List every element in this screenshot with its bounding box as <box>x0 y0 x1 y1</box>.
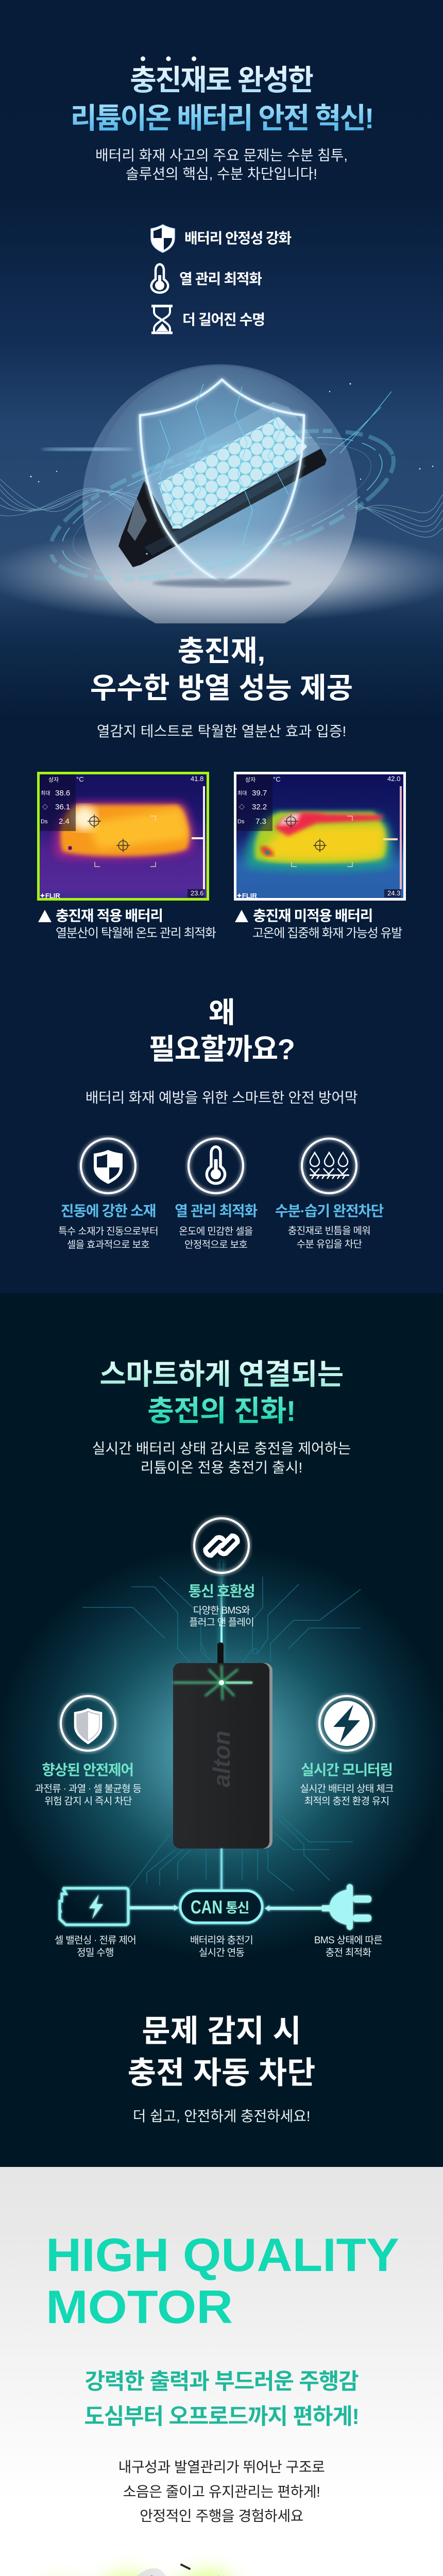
benefit text 1 <box>58 1226 158 1250</box>
icon: chain <box>191 1515 252 1577</box>
benefit text 3: 충진재로 빈틈을 메워 <box>288 1226 370 1236</box>
readouts <box>236 774 401 900</box>
monitoring text: 실시간 배터리 상태 체크 <box>300 1784 394 1794</box>
illustration: shielded battery pack <box>0 364 443 623</box>
motor subheading: 강력한 출력과 부드러운 주행감 <box>85 2369 358 2394</box>
diagram text: plug: BMS 상태에 따른 <box>314 1935 382 1946</box>
readouts: 상자 <box>245 776 255 783</box>
waves: left <box>0 479 149 520</box>
motor subheading <box>84 2369 359 2429</box>
panel: high quality motor <box>0 2167 443 2576</box>
caption text right: 고온에 집중해 화재 가능성 유발 <box>252 926 402 940</box>
heading: why needed <box>149 996 294 1065</box>
thermal image: with filler <box>37 772 209 901</box>
arrow: battery to CAN <box>129 1906 175 1909</box>
readouts: 36.1 <box>55 803 70 811</box>
hero dots <box>141 56 196 61</box>
hero title line 1: 충진재로 완성한 <box>130 64 313 96</box>
crosshairs <box>88 815 130 852</box>
monitoring text: 최적의 충전 환경 유지 <box>304 1796 389 1807</box>
safety title: 향상된 안전제어 <box>42 1762 133 1778</box>
compatibility title: 통신 호환성 <box>189 1583 254 1599</box>
readouts <box>40 774 204 900</box>
readouts: °C <box>273 775 281 783</box>
benefit text 2: 안정적으로 보호 <box>184 1240 247 1250</box>
diagram text: CAN: 실시간 연동 <box>199 1947 244 1958</box>
brake disc <box>69 2557 189 2576</box>
motor text: 안정적인 주행을 경험하세요 <box>140 2508 303 2524</box>
compatibility text: 플러그 앤 플레이 <box>189 1617 254 1628</box>
diagram text: plug <box>314 1935 382 1958</box>
icon: checkered shield <box>150 224 175 253</box>
caption title right: 충진재 미적용 배터리 <box>253 908 372 924</box>
benefit text 1: 셀을 효과적으로 보호 <box>67 1240 149 1250</box>
hero text <box>95 147 348 182</box>
compatibility text <box>189 1605 254 1628</box>
heading: why needed: 왜 <box>209 996 234 1029</box>
motor subheading: 도심부터 오프로드까지 편하게! <box>84 2404 359 2429</box>
motor text <box>118 2459 325 2524</box>
battery case <box>118 449 327 567</box>
icon: circle shield <box>77 1135 139 1197</box>
readouts: ✦FLIR <box>236 892 257 900</box>
charger intro text: 리튬이온 전용 충전기 출시! <box>141 1460 302 1476</box>
diagram text: CAN <box>190 1935 253 1958</box>
heading: smart connected: 스마트하게 연결되는 <box>99 1358 344 1391</box>
heading: high quality motor: MOTOR <box>46 2281 233 2332</box>
benefit text 1: 특수 소재가 진동으로부터 <box>58 1226 158 1237</box>
readouts: 최대 <box>237 790 247 796</box>
readouts: ◇ <box>239 804 245 810</box>
heat halo <box>55 802 193 859</box>
brand mark: alton <box>208 1731 235 1787</box>
green glow <box>33 2552 397 2576</box>
heading: heat dissipation <box>90 635 353 704</box>
caption: with filler <box>38 908 216 940</box>
feature 2: 열 관리 최적화 <box>179 271 262 287</box>
heading: high quality motor <box>46 2229 399 2332</box>
glow: light beam <box>220 1561 223 1662</box>
charger cable <box>217 1642 224 1664</box>
particles <box>30 383 433 554</box>
heading: high quality motor: HIGH QUALITY <box>46 2229 399 2281</box>
caption text left: 열분산이 탁월해 온도 관리 최적화 <box>56 926 216 940</box>
hero title line 2: 리튬이온 배터리 안전 혁신! <box>70 102 373 134</box>
energy shield outline <box>140 380 304 583</box>
diagram: CAN communication <box>57 1846 373 1932</box>
benefit text 3 <box>288 1226 370 1250</box>
thermal image: without filler <box>234 772 406 901</box>
benefit title 1: 진동에 강한 소재 <box>61 1203 156 1219</box>
readouts: 32.2 <box>252 803 267 811</box>
lightning arcs <box>160 384 391 546</box>
arrow: plug to CAN <box>269 1907 325 1910</box>
CAN label: CAN <box>191 1896 223 1918</box>
readouts: 38.6 <box>55 789 70 798</box>
icon: thermometer <box>150 263 169 294</box>
safety text: 위험 감지 시 즉시 차단 <box>44 1796 132 1807</box>
panel: smart charger <box>0 1293 443 2167</box>
readouts: ✦FLIR <box>40 892 60 900</box>
icon: lightning <box>316 1692 378 1754</box>
sphere <box>82 364 357 639</box>
glow: floor light <box>0 526 443 623</box>
icon: circle moisture <box>298 1135 360 1197</box>
heading: heat dissipation: 우수한 방열 성능 제공 <box>90 672 353 704</box>
charger body <box>172 1663 272 1849</box>
subheading: smart barrier: 배터리 화재 예방을 위한 스마트한 안전 방어막 <box>86 1090 357 1106</box>
plug icon <box>322 1884 353 1930</box>
benefit text 3: 수분 유입을 차단 <box>297 1239 362 1250</box>
readouts: ◇ <box>42 804 48 810</box>
feature 3: 더 길어진 수명 <box>182 312 265 328</box>
caption: without filler <box>235 908 402 940</box>
readouts: °C <box>76 775 84 783</box>
diagram text: CAN: 배터리와 충전기 <box>190 1935 253 1946</box>
heading: heat dissipation: 충진재, <box>178 635 265 667</box>
orbit: tech swirl <box>35 400 409 609</box>
triangle marker right <box>235 910 248 922</box>
battery icon <box>60 1888 128 1925</box>
caption title left: 충진재 적용 배터리 <box>56 908 163 924</box>
charger intro text: 실시간 배터리 상태 감시로 충전을 제어하는 <box>92 1440 351 1456</box>
link to charger <box>220 1849 223 1890</box>
heading: auto cutoff <box>128 2014 315 2090</box>
battery cells <box>158 416 308 529</box>
CAN pill outline <box>180 1891 262 1923</box>
triangle marker left <box>38 910 52 922</box>
safety text: 과전류 · 과열 · 셀 불균형 등 <box>35 1784 141 1794</box>
diagram: circuit traces <box>82 1577 361 1891</box>
closing text: 더 쉽고, 안전하게 충전하세요! <box>133 2108 310 2124</box>
monitoring text <box>300 1784 394 1807</box>
heading: why needed: 필요할까요? <box>149 1033 294 1065</box>
heading: auto cutoff: 충전 자동 차단 <box>128 2056 315 2090</box>
diagram text: battery: 셀 밸런싱 · 전류 제어 <box>55 1935 136 1946</box>
benefit title 2: 열 관리 최적화 <box>175 1203 257 1219</box>
readouts: 상자 <box>48 776 59 783</box>
cool halo <box>246 813 392 871</box>
icon: half shield <box>57 1692 119 1754</box>
heading: charging evolution: 충전의 진화! <box>147 1395 296 1427</box>
crosshairs <box>284 815 327 852</box>
readouts: 42.0 <box>387 775 400 783</box>
readouts: 24.3 <box>387 889 400 897</box>
panel: battery safety hero and thermal section <box>0 0 443 1293</box>
icon: hourglass <box>151 305 173 334</box>
benefit text 2: 온도에 민감한 셀을 <box>179 1226 253 1237</box>
warm body <box>254 812 386 863</box>
benefit title 3: 수분·습기 완전차단 <box>275 1203 383 1219</box>
readouts: 최대 <box>41 790 50 796</box>
safety text <box>35 1784 141 1807</box>
illustration: exploded motor <box>41 2558 243 2576</box>
readouts: 39.7 <box>252 789 267 798</box>
readouts: 7.3 <box>255 817 266 826</box>
flare <box>41 448 134 451</box>
readouts: Ds <box>41 819 48 825</box>
waves: right <box>355 495 443 537</box>
readouts: 41.8 <box>191 775 203 783</box>
benefit text 2 <box>179 1226 253 1250</box>
hot body <box>60 805 189 856</box>
heading: auto cutoff: 문제 감지 시 <box>142 2014 301 2048</box>
charger intro text <box>92 1440 351 1476</box>
readouts: 23.6 <box>191 889 203 897</box>
diagram: CAN communication: 통신 <box>226 1900 249 1916</box>
diagram text: battery: 정밀 수행 <box>77 1947 114 1958</box>
compatibility text: 다양한 BMS와 <box>193 1605 250 1616</box>
hero text: 솔루션의 핵심, 수분 차단입니다! <box>126 166 317 182</box>
hero text: 배터리 화재 사고의 주요 문제는 수분 침투, <box>95 147 348 163</box>
monitoring title: 실시간 모니터링 <box>301 1762 393 1778</box>
diagram text: plug: 충전 최적화 <box>326 1947 371 1958</box>
feature 1: 배터리 안정성 강화 <box>184 230 291 246</box>
diagram text: battery <box>55 1935 136 1958</box>
motor text: 내구성과 발열관리가 뛰어난 구조로 <box>118 2459 325 2475</box>
motor cover <box>124 2575 225 2576</box>
shield floor shadow <box>152 579 292 587</box>
motor text: 소음은 줄이고 유지관리는 편하게! <box>123 2483 320 2499</box>
green flare <box>173 1665 252 1700</box>
subheading: thermal test: 열감지 테스트로 탁월한 열분산 효과 입증! <box>97 723 346 739</box>
readouts: Ds <box>237 819 245 825</box>
readouts: 2.4 <box>59 817 70 826</box>
icon: circle thermometer <box>185 1135 247 1197</box>
battery translucent shell <box>144 402 320 528</box>
